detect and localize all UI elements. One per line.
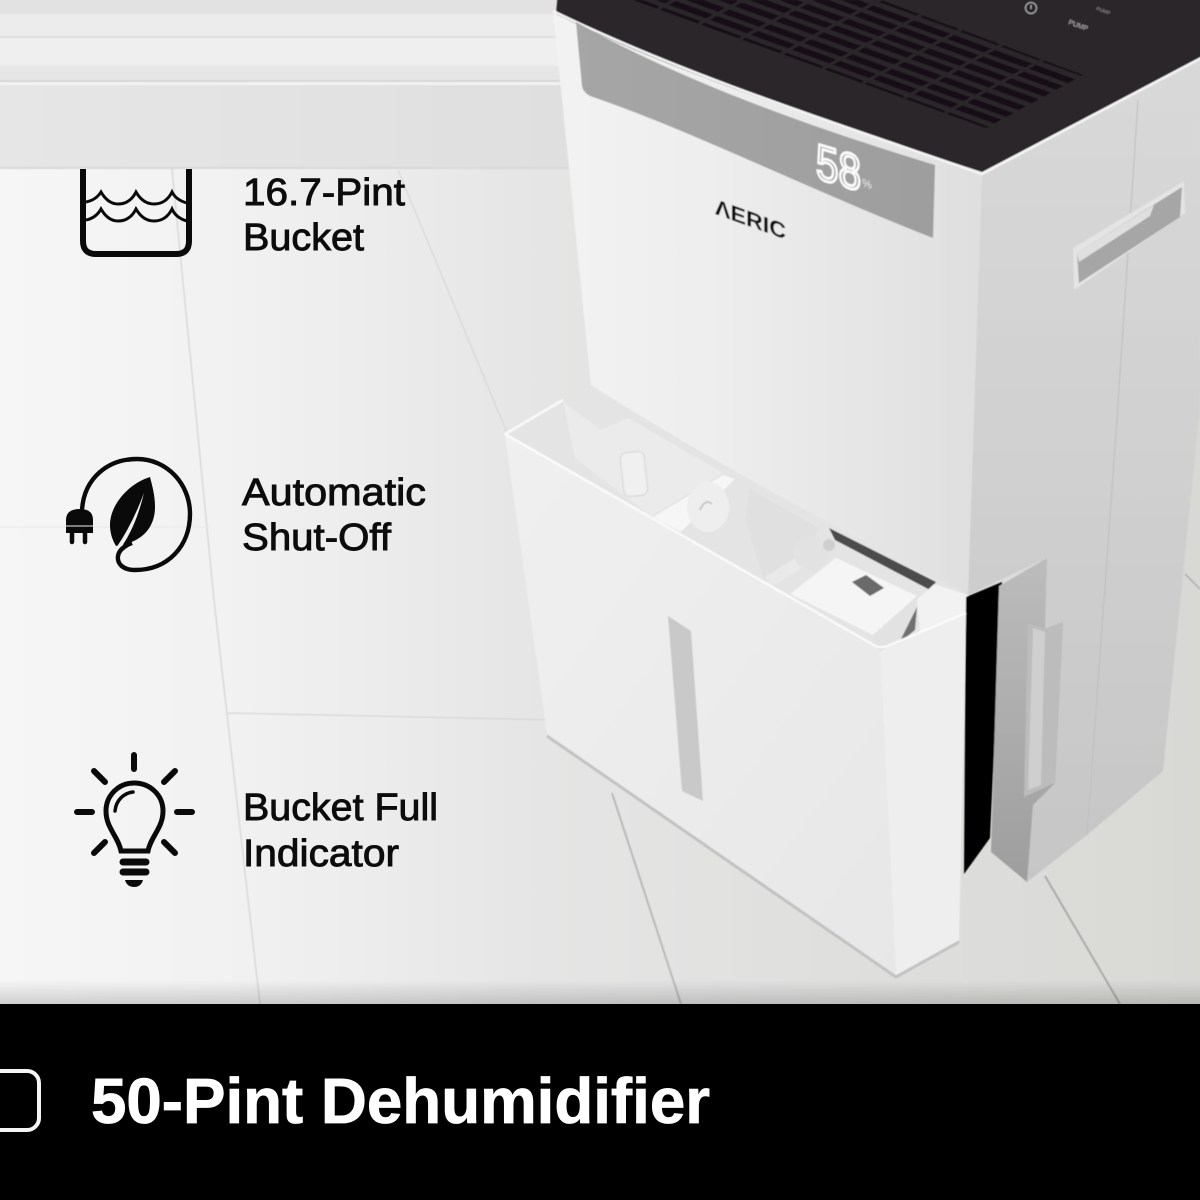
top panel dark — [556, 0, 1200, 172]
bucket interior — [507, 385, 968, 647]
bucket floor shadow — [547, 736, 959, 977]
white rim — [553, 11, 1200, 174]
icon: light bulb — [77, 755, 192, 887]
side seam line — [1087, 100, 1138, 835]
label: Automatic Shut-Off: Shut-Off — [242, 517, 391, 559]
label: Automatic Shut-Off: Automatic — [242, 472, 426, 514]
bottom title banner — [0, 1004, 1200, 1200]
air vent grille — [634, 0, 1082, 128]
title: 50-Pint Dehumidifier — [91, 1065, 710, 1137]
bucket rim — [505, 400, 966, 647]
feature: bucket full indicator — [77, 755, 438, 887]
label: Bucket Full Indicator: Indicator — [243, 833, 399, 875]
bucket water-level window — [668, 616, 703, 801]
label: 16.7-Pint Bucket: Bucket — [243, 217, 364, 259]
dehumidifier product photo — [505, 0, 1200, 977]
feature: 16.7-pint bucket — [83, 169, 405, 259]
icon: plug and leaf — [66, 459, 190, 570]
gray display band — [576, 22, 935, 238]
digital humidity readout: % — [862, 177, 872, 192]
water bucket side face — [880, 613, 966, 975]
digital humidity readout: 58 — [816, 133, 861, 202]
rounded outline badge — [0, 1071, 39, 1130]
label: Bucket Full Indicator: Bucket Full — [243, 787, 438, 829]
dark recess gap — [964, 582, 1002, 874]
side carrying handle — [1073, 181, 1185, 290]
main body side face — [968, 57, 1200, 882]
control panel: power symbol and pump label — [1026, 2, 1112, 33]
brand logo: ΛERIC — [715, 194, 786, 244]
control panel: power symbol and pump label: PUMP — [1095, 6, 1112, 17]
feature: automatic shut-off — [66, 459, 426, 570]
water bucket front face — [505, 435, 896, 975]
label: 16.7-Pint Bucket: 16.7-Pint — [243, 172, 405, 214]
side recess and bucket track — [991, 558, 1063, 882]
control panel: power symbol and pump label: PUMP — [1067, 19, 1089, 33]
main body front face — [553, 10, 982, 595]
icon: bucket with water — [83, 169, 189, 254]
